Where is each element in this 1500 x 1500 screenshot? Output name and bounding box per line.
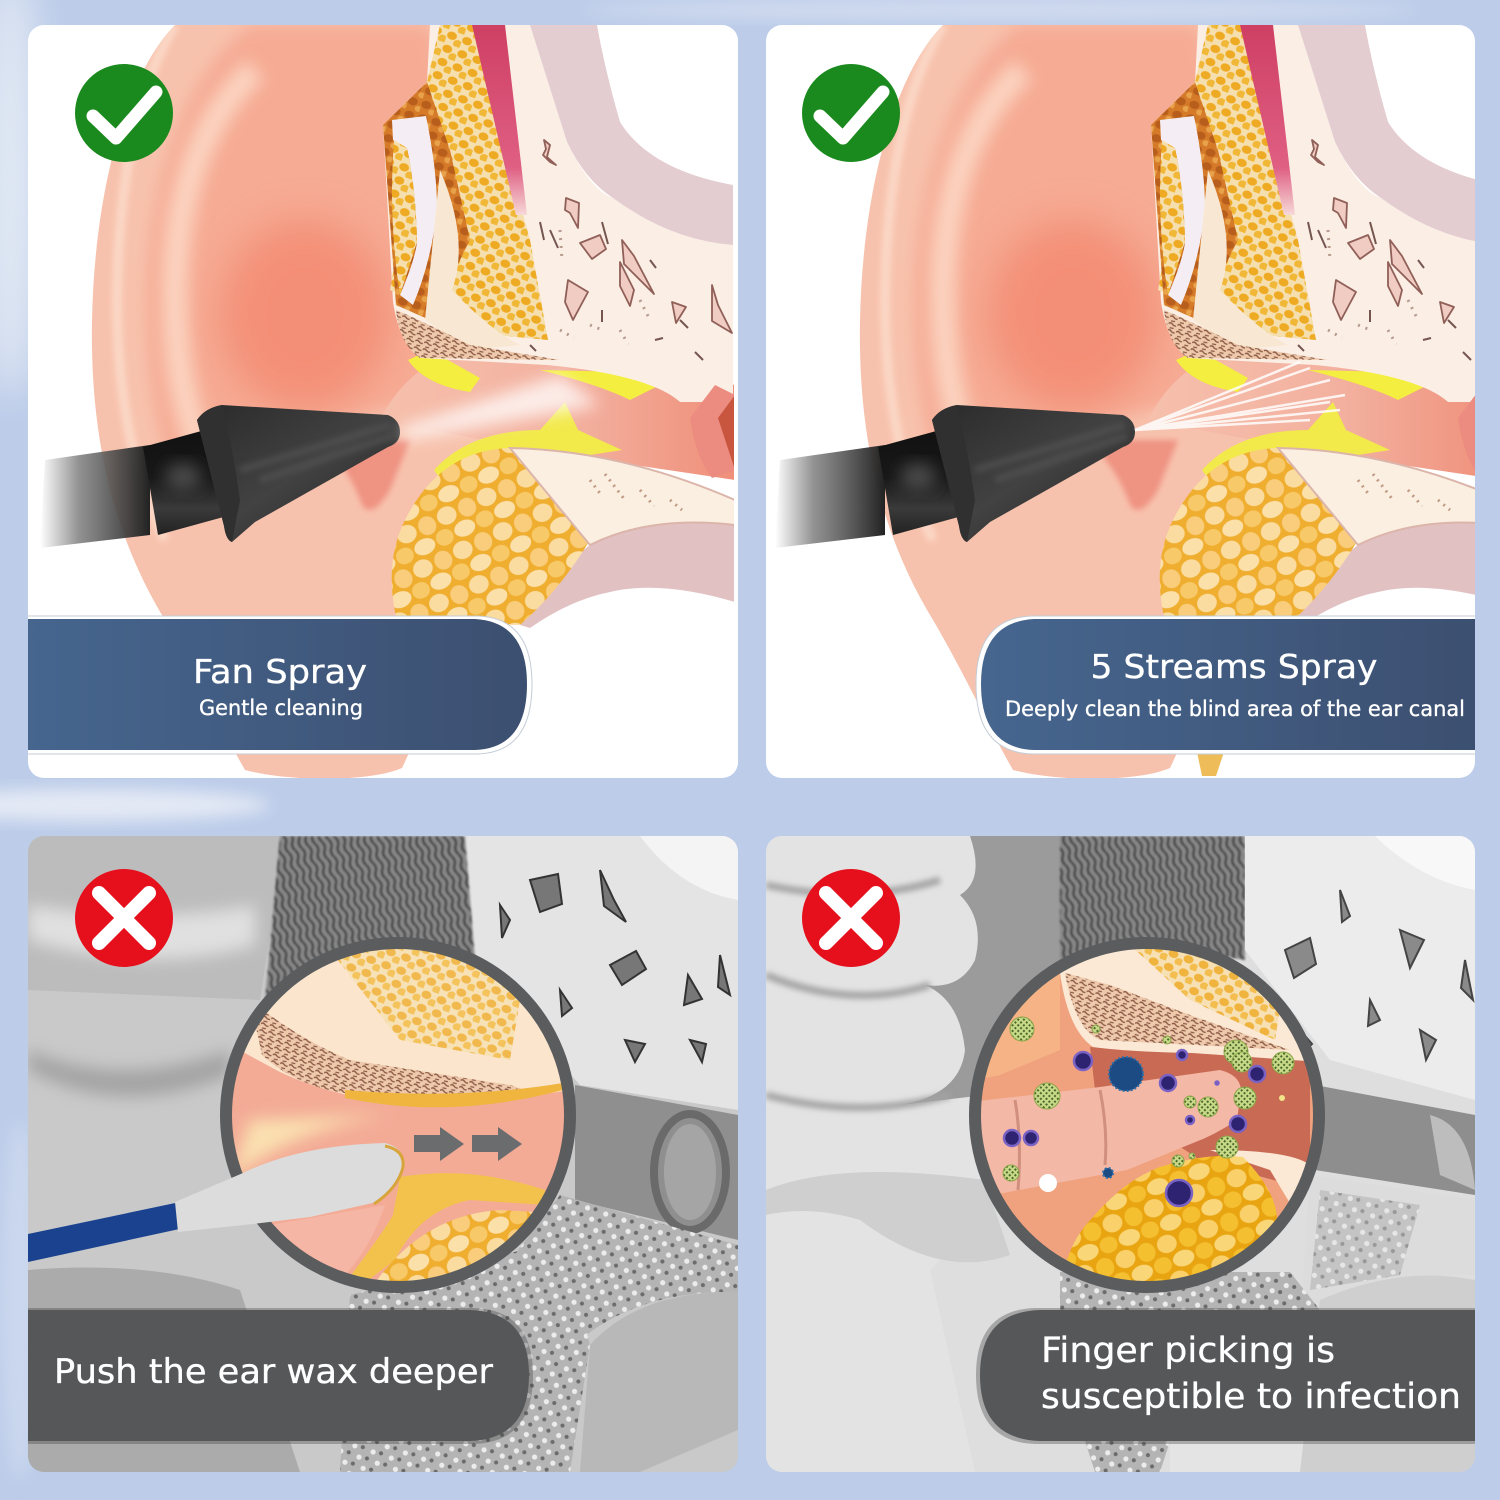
panel: fan spray (20, 25, 738, 779)
greyscale hand and anatomy (766, 836, 1475, 1472)
label: finger picking: Finger picking is (1041, 1331, 1335, 1371)
label: finger picking (976, 1308, 1480, 1444)
icon: red cross (802, 869, 900, 967)
label: 5 streams spray: Deeply clean the blind area of the ear canal (1005, 697, 1465, 721)
arrows (414, 1127, 522, 1161)
label: push the ear wax deeper (20, 1308, 533, 1444)
panel: cotton swab warning (20, 836, 738, 1472)
label: finger picking: susceptible to infection (1041, 1377, 1461, 1417)
icon: green check (802, 64, 900, 162)
nozzle (40, 405, 400, 548)
label: 5 streams spray: 5 Streams Spray (1090, 647, 1378, 686)
label: 5 streams spray (976, 616, 1480, 754)
label: fan spray (20, 616, 532, 754)
fan spray mist (400, 375, 600, 440)
greyscale anatomy (28, 836, 738, 1472)
ear illustration (92, 25, 735, 779)
icon: red cross (75, 869, 173, 967)
magnifier: finger and bacteria (970, 940, 1320, 1290)
blue bacteria (1103, 1057, 1143, 1178)
purple bacteria (1004, 1050, 1265, 1206)
white margin at illustration edge (734, 25, 738, 778)
ear illustration (860, 25, 1500, 779)
label: push the ear wax deeper: Push the ear wax deeper (54, 1352, 493, 1392)
label: fan spray: Fan Spray (193, 652, 367, 691)
magnifier: cotton swab pushing wax (226, 936, 570, 1290)
panel: 5 streams spray (766, 25, 1500, 779)
green bacteria (1003, 1017, 1294, 1181)
five spray streams (1135, 362, 1345, 430)
nozzle (775, 405, 1135, 548)
label: fan spray: Gentle cleaning (199, 696, 363, 720)
icon: green check (75, 64, 173, 162)
wax drip (1198, 754, 1224, 776)
panel: finger picking warning (766, 836, 1480, 1472)
cotton swab (28, 1143, 403, 1262)
